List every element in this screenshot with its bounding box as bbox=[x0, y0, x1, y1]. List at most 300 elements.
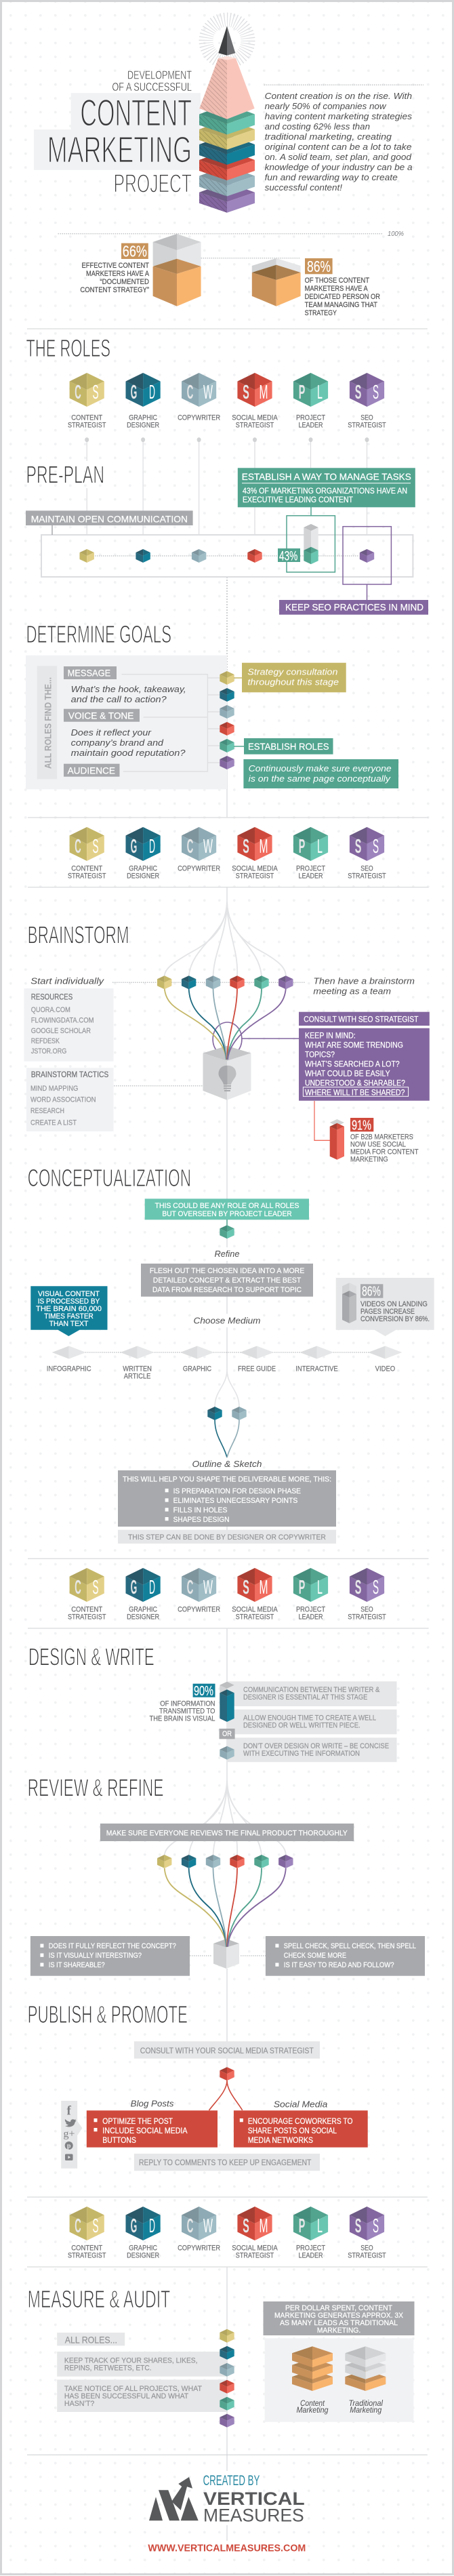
role cubes row 2: PROJECT bbox=[296, 865, 325, 873]
66 percent stat bbox=[80, 243, 150, 294]
role cubes row 4: STRATEGIST bbox=[68, 2252, 106, 2260]
role cubes row 1: STRATEGIST bbox=[236, 422, 274, 430]
86 percent stat: 86% bbox=[307, 258, 331, 275]
refine description bbox=[141, 1264, 313, 1297]
leads stat box: PER DOLLAR SPENT, CONTENT bbox=[285, 2304, 392, 2312]
message block: and the call to action? bbox=[71, 694, 167, 704]
leads stat box bbox=[263, 2301, 415, 2335]
role cubes row 4: S bbox=[243, 2215, 249, 2237]
leads stat box: MARKETING. bbox=[317, 2327, 360, 2335]
100 percent line: 100% bbox=[388, 230, 404, 238]
medium labels: GRAPHIC bbox=[183, 1365, 211, 1373]
reply to comments: REPLY TO COMMENTS TO KEEP UP ENGAGEMENT bbox=[139, 2158, 312, 2167]
role cubes row 2: M bbox=[259, 836, 268, 858]
tips panels bbox=[227, 1681, 397, 1762]
keep track panel bbox=[57, 2352, 227, 2377]
copywriter cube bbox=[220, 1746, 234, 1760]
66 percent stat: CONTENT STRATEGY” bbox=[80, 286, 149, 294]
visual content callout: IS PROCESSED BY bbox=[38, 1297, 100, 1306]
role cubes row 2: DESIGNER bbox=[127, 872, 159, 881]
strategy consultation callout bbox=[234, 663, 346, 692]
manage tasks callout: 43% OF MARKETING ORGANIZATIONS HAVE AN bbox=[243, 486, 407, 496]
vertical text: VERTICAL bbox=[203, 2489, 305, 2509]
role cubes row 3: CONTENT bbox=[71, 1606, 103, 1614]
91 percent stat bbox=[314, 1101, 419, 1163]
content marketing stack bbox=[292, 2346, 333, 2391]
role cubes row 3: D bbox=[149, 1577, 155, 1598]
role cubes row 2: LEADER bbox=[298, 872, 323, 881]
role cubes row 1: PROJECT bbox=[296, 414, 325, 422]
intro paragraph: knowledge of your industry can be a bbox=[265, 162, 413, 172]
heading: MARKETING bbox=[47, 129, 192, 170]
social media box: ENCOURAGE COWORKERS TO bbox=[248, 2116, 352, 2126]
heading: pre-plan: PRE-PLAN bbox=[26, 461, 104, 489]
heading: CONTENT bbox=[80, 92, 192, 134]
86 percent stat bbox=[305, 258, 380, 317]
publish diagram bbox=[61, 2041, 368, 2171]
role cubes row 3: L bbox=[317, 1577, 323, 1598]
role cubes row 4: GRAPHIC bbox=[129, 2245, 157, 2253]
intro paragraph bbox=[265, 91, 413, 193]
same page callout: is on the same page conceptually bbox=[249, 773, 392, 784]
outline description: IS PREPARATION FOR DESIGN PHASE bbox=[173, 1487, 301, 1495]
or label: OR bbox=[222, 1730, 232, 1738]
role cubes row 1: S bbox=[243, 382, 249, 403]
stack labels bbox=[297, 2400, 383, 2415]
goals role cubes bbox=[220, 671, 234, 769]
rays around pencil tip bbox=[206, 20, 248, 62]
role cubes row 3: S bbox=[92, 1577, 99, 1598]
refine label bbox=[211, 1247, 243, 1261]
video stat callout: 86% bbox=[362, 1285, 381, 1300]
keep in mind box bbox=[299, 1028, 430, 1101]
maintain communication label bbox=[26, 510, 193, 535]
heading: publish and promote: PUBLISH & PROMOTE bbox=[28, 2000, 188, 2028]
maintain communication label: MAINTAIN OPEN COMMUNICATION bbox=[31, 513, 188, 524]
43 percent column: 43% bbox=[279, 549, 297, 564]
review checklist right bbox=[266, 1936, 425, 1976]
90 percent stat: OF INFORMATION bbox=[160, 1699, 215, 1708]
role cubes row 3: COPYWRITER bbox=[178, 1606, 220, 1614]
pencil stack of layers bbox=[199, 56, 255, 213]
91 percent stat: 91% bbox=[352, 1118, 371, 1133]
dotted team line bbox=[112, 982, 306, 1086]
heading: design and write: DESIGN & WRITE bbox=[28, 1643, 154, 1671]
role cubes row 4: CONTENT bbox=[71, 2245, 103, 2253]
keep in mind box: WHERE WILL IT BE SHARED? bbox=[305, 1088, 405, 1098]
medium dotted line bbox=[81, 1352, 373, 1353]
keep in mind box: WHAT’S SEARCHED A LOT? bbox=[305, 1060, 400, 1069]
86 percent cube bbox=[252, 258, 301, 306]
role cubes row 2: S bbox=[92, 836, 99, 858]
review checklist left: IS IT VISUALLY INTERESTING? bbox=[49, 1952, 142, 1960]
role cubes row 2: P bbox=[299, 836, 305, 858]
review everyone bar bbox=[100, 1824, 354, 1841]
role cubes row 1: M bbox=[259, 382, 268, 403]
visual content callout: THE BRAIN 60,000 bbox=[36, 1305, 102, 1313]
review checklist right: CHECK SOME MORE bbox=[284, 1952, 346, 1960]
resources list: FLOWINGDATA.COM bbox=[31, 1017, 94, 1025]
heading: determine goals: DETERMINE GOALS bbox=[26, 620, 171, 648]
colored role threads bbox=[165, 988, 286, 1060]
connector lines bbox=[122, 675, 227, 771]
consult social strategist: CONSULT WITH YOUR SOCIAL MEDIA STRATEGIST bbox=[140, 2046, 314, 2055]
role cubes row 2: C bbox=[75, 836, 81, 858]
role cubes row 3: SOCIAL MEDIA bbox=[232, 1606, 278, 1614]
resources list bbox=[24, 988, 114, 1062]
pencil tip bbox=[218, 26, 235, 56]
refine description: FLESH OUT THE CHOSEN IDEA INTO A MORE bbox=[150, 1267, 304, 1275]
project leader note: BUT OVERSEEN BY PROJECT LEADER bbox=[162, 1210, 292, 1218]
logo mark bbox=[149, 2477, 199, 2520]
role cubes row 1: L bbox=[317, 382, 323, 403]
role cubes row 2: W bbox=[203, 836, 213, 858]
intro divider bbox=[264, 84, 424, 85]
same page callout: Continuously make sure everyone bbox=[249, 763, 392, 773]
heading: review and refine: REVIEW & REFINE bbox=[28, 1773, 163, 1801]
stack labels: Content bbox=[300, 2400, 325, 2408]
audience block: AUDIENCE bbox=[68, 765, 115, 776]
90 percent stat: 90% bbox=[194, 1684, 213, 1699]
tips panels: ALLOW ENOUGH TIME TO CREATE A WELL bbox=[243, 1714, 376, 1722]
heading: conceptualization: CONCEPTUALIZATION bbox=[28, 1164, 191, 1192]
visual content callout: TIMES FASTER bbox=[44, 1312, 94, 1321]
take notice panel: HASN’T? bbox=[64, 2400, 94, 2408]
then team meeting: meeting as a team bbox=[313, 986, 391, 997]
video stat callout: VIDEOS ON LANDING bbox=[360, 1300, 428, 1308]
project leader note: THIS COULD BE ANY ROLE OR ALL ROLES bbox=[155, 1202, 299, 1210]
project leader cube bbox=[220, 1225, 234, 1239]
role cubes row 4: PROJECT bbox=[296, 2245, 325, 2253]
who does this step: THIS STEP CAN BE DONE BY DESIGNER OR COPYWRITER bbox=[128, 1533, 326, 1542]
role cubes row 2: STRATEGIST bbox=[348, 872, 386, 881]
66 percent stat: “DOCUMENTED bbox=[100, 278, 149, 286]
review diagram bbox=[30, 1781, 425, 1976]
blog posts box: BUTTONS bbox=[102, 2135, 136, 2145]
seo focus circle bbox=[213, 1022, 242, 1056]
role cubes row 3: W bbox=[203, 1577, 213, 1598]
role cubes row 2: D bbox=[149, 836, 155, 858]
all roles label: ALL ROLES... bbox=[65, 2334, 117, 2345]
keep in mind box: UNDERSTOOD & SHARABLE? bbox=[305, 1079, 405, 1088]
colored role threads bbox=[165, 1868, 286, 1947]
team outline frame bbox=[41, 535, 413, 577]
SEO callout: KEEP SEO PRACTICES IN MIND bbox=[285, 601, 424, 612]
intro paragraph: having content marketing strategies bbox=[265, 111, 413, 121]
stats: documented strategy bbox=[58, 230, 404, 317]
role cubes row 3: M bbox=[259, 1577, 268, 1598]
role cubes row 3: P bbox=[299, 1577, 305, 1598]
small box bbox=[213, 1939, 239, 1969]
role cubes row 3: C bbox=[75, 1577, 81, 1598]
medium labels bbox=[47, 1365, 395, 1380]
voice and tone block: VOICE & TONE bbox=[68, 710, 133, 721]
86 percent stat: TEAM MANAGING THAT bbox=[305, 301, 377, 309]
central timeline line bbox=[226, 577, 228, 2541]
establish roles callout: ESTABLISH ROLES bbox=[248, 741, 329, 752]
role cubes row 3: S bbox=[355, 1577, 361, 1598]
role cubes row 3: LEADER bbox=[298, 1613, 323, 1622]
heading: brainstorm: BRAINSTORM bbox=[28, 921, 129, 949]
91 percent stat: OF B2B MARKETERS bbox=[350, 1133, 413, 1141]
comparison panel bbox=[265, 2338, 413, 2422]
role cubes row 4: LEADER bbox=[298, 2252, 323, 2260]
icon: pinterest: p bbox=[67, 2142, 71, 2150]
voice and tone block: maintain good reputation? bbox=[71, 748, 186, 758]
role cubes row 3: STRATEGIST bbox=[68, 1613, 106, 1622]
leads stat box: AS MANY LEADS AS TRADITIONAL bbox=[280, 2319, 398, 2327]
medium labels: FREE GUIDE bbox=[238, 1365, 276, 1373]
measure diagram bbox=[57, 2301, 414, 2428]
role cubes row 1: G bbox=[131, 382, 137, 403]
start individually: Start individually bbox=[30, 976, 105, 986]
role pins and drop lines bbox=[85, 437, 369, 535]
role cubes row 1: S bbox=[355, 382, 361, 403]
design and write diagram bbox=[149, 1681, 397, 1762]
role cubes row 1: GRAPHIC bbox=[129, 414, 157, 422]
43 percent column bbox=[278, 524, 318, 564]
message block: MESSAGE bbox=[68, 668, 110, 679]
measure cubes bbox=[220, 2329, 234, 2428]
role cubes row 1: DESIGNER bbox=[127, 422, 159, 430]
tips panels: DON’T OVER DESIGN OR WRITE – BE CONCISE bbox=[243, 1742, 389, 1750]
take notice panel: HAS BEEN SUCCESSFUL AND WHAT bbox=[64, 2392, 188, 2400]
role cubes row 4: S bbox=[373, 2215, 379, 2237]
choose medium label bbox=[191, 1314, 263, 1327]
side band bbox=[37, 666, 57, 779]
social media cube bbox=[220, 2067, 234, 2080]
team cubes bbox=[157, 975, 293, 989]
role cubes row 3: STRATEGIST bbox=[236, 1613, 274, 1622]
social media label: Social Media bbox=[274, 2099, 327, 2110]
consult seo strategist bbox=[299, 1012, 430, 1026]
role cubes row 2: S bbox=[355, 836, 361, 858]
role cubes row 2 bbox=[68, 827, 386, 881]
keep in mind box: WHAT COULD BE EASILY bbox=[305, 1069, 390, 1079]
91 percent stat: MEDIA FOR CONTENT bbox=[350, 1148, 419, 1156]
90 percent stat: THE BRAIN IS VISUAL bbox=[149, 1714, 215, 1723]
role cubes row 1: S bbox=[373, 382, 379, 403]
resources list: REFDESK bbox=[31, 1037, 60, 1045]
resources list: RESOURCES bbox=[31, 994, 73, 1002]
medium labels: ARTICLE bbox=[124, 1372, 150, 1380]
resources list: QUORA.COM bbox=[31, 1006, 70, 1014]
heading: DEVELOPMENT bbox=[127, 68, 192, 82]
86 percent stat: DEDICATED PERSON OR bbox=[305, 293, 380, 301]
medium diamonds bbox=[52, 1346, 402, 1359]
90 percent stat: TRANSMITTED TO bbox=[159, 1707, 215, 1715]
resources list: GOOGLE SCHOLAR bbox=[31, 1027, 91, 1035]
tips panels: DESIGNER IS ESSENTIAL AT THIS STAGE bbox=[243, 1693, 367, 1702]
86 percent stat: STRATEGY bbox=[305, 309, 337, 317]
created by text: CREATED BY bbox=[203, 2472, 260, 2489]
role cubes row 4: SOCIAL MEDIA bbox=[232, 2245, 278, 2253]
brainstorm tactics list: MIND MAPPING bbox=[30, 1085, 78, 1093]
strategy consultation callout: Strategy consultation bbox=[247, 667, 337, 677]
measures text: MEASURES bbox=[203, 2505, 304, 2525]
intro paragraph: nearly 50% of companies now bbox=[265, 101, 387, 111]
choose medium label: Choose Medium bbox=[194, 1315, 261, 1326]
title block bbox=[34, 20, 424, 213]
90 percent column bbox=[220, 1682, 234, 1722]
role cubes row 2: C bbox=[187, 836, 193, 858]
visual content callout: THAN TEXT bbox=[49, 1320, 89, 1328]
role cubes row 1: STRATEGIST bbox=[348, 422, 386, 430]
keep in mind box: TOPICS? bbox=[305, 1050, 335, 1060]
role cubes row 1 bbox=[68, 373, 386, 430]
blog posts box: OPTIMIZE THE POST bbox=[102, 2116, 173, 2126]
role cubes row 3: C bbox=[187, 1577, 193, 1598]
66 percent stat: 66% bbox=[123, 243, 147, 260]
manage tasks callout: EXECUTIVE LEADING CONTENT bbox=[243, 495, 354, 504]
who does this step bbox=[118, 1530, 336, 1544]
role cubes row 1: COPYWRITER bbox=[178, 414, 220, 422]
brainstorm tactics list: RESEARCH bbox=[30, 1107, 64, 1115]
voice and tone block: company’s brand and bbox=[71, 738, 164, 748]
gray funnel bbox=[165, 1781, 286, 1855]
designer and copywriter fork bbox=[207, 1369, 247, 1457]
role cubes row 1: D bbox=[149, 382, 155, 403]
icon: google plus: g+ bbox=[63, 2129, 75, 2139]
conceptualization diagram bbox=[30, 1199, 434, 1544]
social media box bbox=[234, 2110, 368, 2148]
leads stat box: MARKETING GENERATES APPROX. 3X bbox=[274, 2312, 404, 2320]
role cubes row 4: S bbox=[355, 2215, 361, 2237]
role cubes row 2: CONTENT bbox=[71, 865, 103, 873]
role cubes row 2: COPYWRITER bbox=[178, 865, 220, 873]
dotted links bbox=[190, 1955, 266, 1956]
role cubes row 1: S bbox=[92, 382, 99, 403]
idea box with bulb bbox=[203, 1046, 251, 1100]
tips panels: DESIGNED OR WELL WRITTEN PIECE. bbox=[243, 1722, 360, 1730]
outline description: ELIMINATES UNNECESSARY POINTS bbox=[173, 1497, 297, 1505]
role cubes row 4: DESIGNER bbox=[127, 2252, 159, 2260]
review cubes bbox=[157, 1855, 293, 1868]
keep in mind box: WHAT ARE SOME TRENDING bbox=[305, 1041, 403, 1050]
social media box: SHARE POSTS ON SOCIAL bbox=[248, 2126, 337, 2135]
outline description: FILLS IN HOLES bbox=[173, 1506, 228, 1514]
91 percent stat: MARKETING bbox=[350, 1155, 388, 1163]
heading: the roles: THE ROLES bbox=[26, 334, 110, 362]
social icons panel bbox=[61, 2101, 82, 2169]
role cubes row 2: SOCIAL MEDIA bbox=[232, 865, 278, 873]
role cubes row 2: S bbox=[243, 836, 249, 858]
message block: What’s the hook, takeaway, bbox=[71, 684, 186, 694]
brainstorm tactics list: BRAINSTORM TACTICS bbox=[31, 1071, 109, 1079]
or label bbox=[220, 1729, 235, 1739]
role cubes row 3: DESIGNER bbox=[127, 1613, 159, 1622]
role cubes row 3: S bbox=[243, 1577, 249, 1598]
goals panel bbox=[26, 656, 227, 789]
blog posts box: INCLUDE SOCIAL MEDIA bbox=[102, 2126, 187, 2135]
66 percent stat: EFFECTIVE CONTENT bbox=[81, 262, 149, 270]
role cubes row 1: P bbox=[299, 382, 305, 403]
tips panels: WITH EXECUTING THE INFORMATION bbox=[243, 1750, 360, 1758]
refine description: DETAILED CONCEPT & EXTRACT THE BEST bbox=[153, 1276, 301, 1285]
role cubes row 1: SEO bbox=[360, 414, 373, 422]
review checklist right: IS IT EASY TO READ AND FOLLOW? bbox=[284, 1961, 394, 1969]
intro paragraph: fun and rewarding way to create bbox=[265, 172, 398, 182]
91 percent stat: NOW USE SOCIAL bbox=[350, 1140, 406, 1148]
role cubes row 4: COPYWRITER bbox=[178, 2245, 220, 2253]
brainstorm diagram bbox=[24, 902, 430, 1163]
role cubes row 4: S bbox=[92, 2215, 99, 2237]
role cubes row 4: STRATEGIST bbox=[236, 2252, 274, 2260]
consult social strategist bbox=[134, 2041, 320, 2059]
pre-plan diagram bbox=[26, 468, 428, 615]
66 percent cube bbox=[153, 234, 201, 306]
medium labels: WRITTEN bbox=[123, 1365, 152, 1373]
role cubes row 4: P bbox=[299, 2215, 305, 2237]
role cubes row 3: STRATEGIST bbox=[348, 1613, 386, 1622]
video stat callout: CONVERSION BY 86%. bbox=[360, 1315, 430, 1323]
stack labels: Marketing bbox=[297, 2407, 329, 2415]
review everyone bar: MAKE SURE EVERYONE REVIEWS THE FINAL PRODUCT THOROUGHLY bbox=[106, 1830, 348, 1838]
role cubes row 4: C bbox=[75, 2215, 81, 2237]
role cubes row 2: GRAPHIC bbox=[129, 865, 157, 873]
outline description: SHAPES DESIGN bbox=[173, 1516, 230, 1524]
role cubes row 2: L bbox=[317, 836, 323, 858]
brainstorm tactics list bbox=[26, 1068, 114, 1131]
role cubes row 2: STRATEGIST bbox=[236, 872, 274, 881]
small role cubes bbox=[80, 549, 374, 563]
voice and tone block bbox=[64, 709, 186, 758]
outline description bbox=[118, 1470, 336, 1527]
then team meeting bbox=[313, 976, 415, 997]
website url: WWW.VERTICALMEASURES.COM bbox=[148, 2543, 306, 2554]
intro paragraph: successful content! bbox=[265, 182, 342, 193]
role cubes row 3: SEO bbox=[360, 1606, 373, 1614]
visual content callout: VISUAL CONTENT bbox=[38, 1290, 100, 1298]
role cubes row 4: STRATEGIST bbox=[348, 2252, 386, 2260]
role cubes row 2: S bbox=[373, 836, 379, 858]
role cubes row 1: C bbox=[187, 382, 193, 403]
medium labels: INTERACTIVE bbox=[295, 1365, 338, 1373]
86 percent stat: MARKETERS HAVE A bbox=[305, 285, 368, 293]
side band: ALL ROLES FIND THE... bbox=[42, 677, 53, 769]
then team meeting: Then have a brainstorm bbox=[313, 976, 415, 986]
brainstorm tactics list: CREATE A LIST bbox=[30, 1119, 77, 1127]
strategy consultation callout: throughout this stage bbox=[247, 677, 339, 687]
role cubes row 4 bbox=[68, 2207, 386, 2260]
role cubes row 1: W bbox=[203, 382, 213, 403]
blog posts box bbox=[87, 2110, 218, 2148]
intro paragraph: traditional marketing, creating bbox=[265, 132, 392, 142]
role cubes row 3: GRAPHIC bbox=[129, 1606, 157, 1614]
video stat callout bbox=[336, 1278, 434, 1336]
outline description: THIS WILL HELP YOU SHAPE THE DELIVERABLE MORE, THIS: bbox=[123, 1475, 331, 1483]
role cubes row 1: STRATEGIST bbox=[68, 422, 106, 430]
role cubes row 1: LEADER bbox=[298, 422, 323, 430]
role cubes row 3: PROJECT bbox=[296, 1606, 325, 1614]
resources list: JSTOR.ORG bbox=[31, 1047, 66, 1055]
role cubes row 4: W bbox=[203, 2215, 213, 2237]
intro paragraph: and costing 62% less than bbox=[265, 121, 370, 132]
role cubes row 4: G bbox=[131, 2215, 137, 2237]
role cubes row 1: SOCIAL MEDIA bbox=[232, 414, 278, 422]
role cubes row 3: S bbox=[373, 1577, 379, 1598]
stack labels: Traditional bbox=[348, 2400, 383, 2408]
heading: measure and audit: MEASURE & AUDIT bbox=[28, 2285, 170, 2313]
role cubes row 4: SEO bbox=[360, 2245, 373, 2253]
manage tasks callout bbox=[238, 468, 415, 572]
dotted link bbox=[201, 258, 300, 259]
social media box: MEDIA NETWORKS bbox=[248, 2135, 313, 2145]
blog posts label: Blog Posts bbox=[131, 2099, 174, 2108]
take notice panel: TAKE NOTICE OF ALL PROJECTS, WHAT bbox=[64, 2385, 202, 2393]
reply to comments bbox=[134, 2154, 320, 2171]
role cubes row 4: L bbox=[317, 2215, 323, 2237]
